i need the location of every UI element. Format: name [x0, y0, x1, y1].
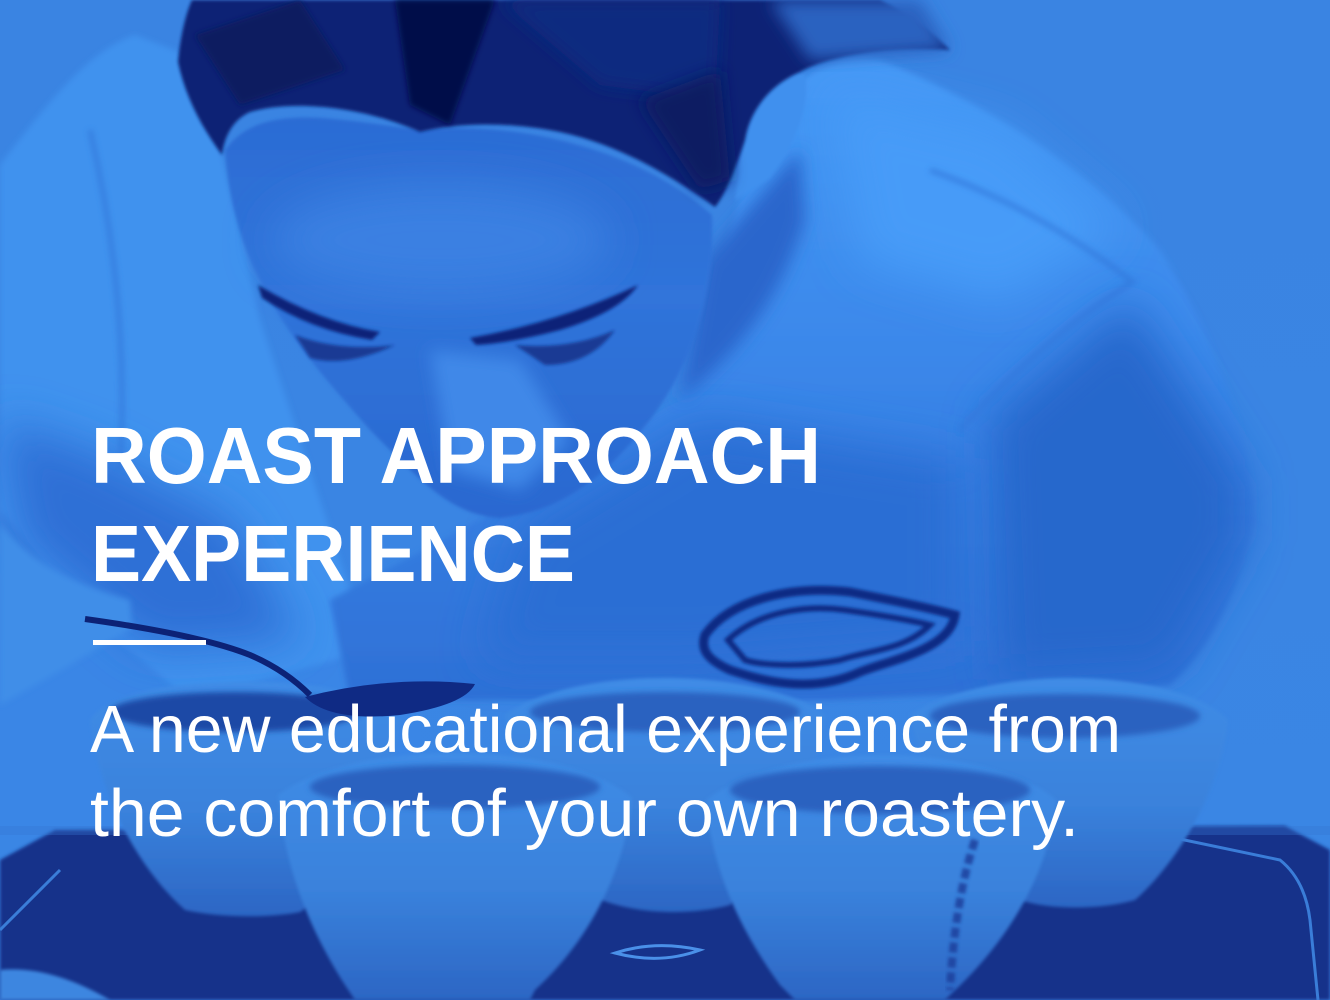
- forehead highlight: [270, 185, 610, 295]
- neck shadow: [680, 150, 805, 400]
- title: EXPERIENCE: [91, 509, 575, 598]
- shirt: torso and shoulders: [0, 35, 1255, 700]
- spoon: [85, 619, 475, 717]
- table: [0, 826, 1330, 1000]
- hair: [178, 0, 950, 207]
- cup: back middle: [505, 678, 825, 912]
- table logo: [615, 946, 700, 958]
- cup: back left: [90, 682, 400, 916]
- cup: back right: [910, 678, 1228, 908]
- nose and lip shading: [430, 350, 570, 490]
- title: ROAST APPROACH: [91, 411, 821, 500]
- subtitle: A new educational experience from: [90, 692, 1121, 767]
- cup: front left: [278, 753, 632, 1000]
- corner cup: [0, 969, 110, 1000]
- cup: front right: [706, 755, 1056, 1000]
- title: [91, 411, 821, 598]
- subtitle: [90, 692, 1121, 851]
- shirt fold shadows: [90, 130, 1135, 470]
- ear: [735, 73, 806, 200]
- subtitle: the comfort of your own roastery.: [90, 776, 1079, 851]
- face: [225, 118, 712, 518]
- hand holding spoon: [0, 525, 132, 705]
- logo on shirt: [704, 590, 955, 684]
- divider rule: [93, 640, 206, 645]
- background lower left: [0, 640, 420, 840]
- brows and eyelashes: [258, 285, 638, 365]
